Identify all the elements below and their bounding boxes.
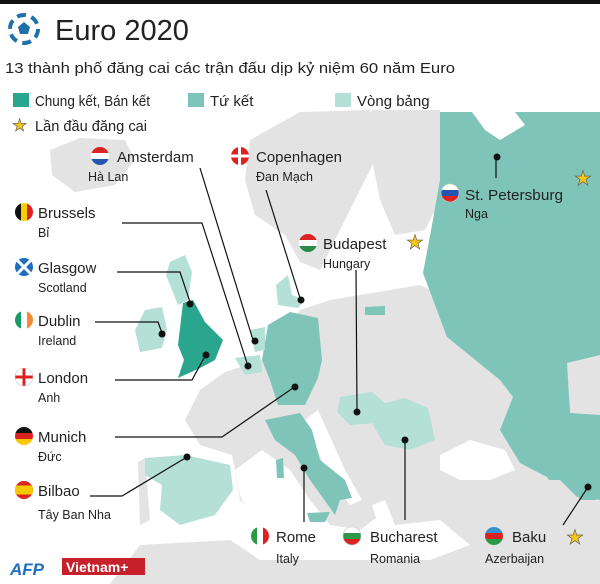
- stars: ★: [566, 527, 584, 549]
- dots: [158, 154, 592, 490]
- logos: AFP: [9, 560, 45, 579]
- stars: ★: [574, 168, 592, 190]
- legend: Vòng bảng: [357, 93, 430, 110]
- Germany: [262, 312, 322, 405]
- Italy: [265, 413, 352, 515]
- city labels: Dublin: [38, 313, 81, 330]
- legend: [12, 93, 430, 135]
- Romania: [373, 398, 435, 450]
- legend: ★: [12, 116, 27, 135]
- city labels: Glasgow: [38, 260, 97, 277]
- Ireland: [135, 307, 167, 352]
- city labels: Đan Mạch: [256, 170, 313, 184]
- Hungary: [337, 392, 387, 425]
- city labels: Hungary: [323, 257, 371, 271]
- city labels: London: [38, 370, 88, 387]
- Netherlands/Belgium: [250, 327, 265, 352]
- subtitle: 13 thành phố đăng cai các trận đấu dịp kỷ niệm 60 năm Euro: [5, 60, 455, 77]
- title: Euro 2020: [55, 15, 189, 47]
- stars: [406, 168, 592, 549]
- city labels: St. Petersburg: [465, 187, 563, 204]
- logos: [9, 558, 145, 579]
- city labels: Baku: [512, 529, 546, 546]
- city labels: Bỉ: [38, 226, 49, 240]
- Russia mid teal: [423, 112, 600, 500]
- city labels: Anh: [38, 391, 60, 405]
- legend: Chung kết, Bán kết: [35, 93, 151, 110]
- city labels: Tây Ban Nha: [38, 508, 111, 522]
- city labels: Azerbaijan: [485, 552, 544, 566]
- city labels: Bucharest: [370, 529, 438, 546]
- city labels: Copenhagen: [256, 149, 342, 166]
- Spain: [138, 458, 150, 525]
- city labels: Amsterdam: [117, 149, 194, 166]
- legend: Lần đầu đăng cai: [35, 118, 147, 135]
- city labels: Romania: [370, 552, 420, 566]
- city labels: Budapest: [323, 236, 387, 253]
- stars: ★: [406, 232, 424, 254]
- city labels: [38, 149, 563, 566]
- ball icon: [10, 15, 38, 43]
- seas: [230, 410, 515, 560]
- England: [178, 300, 223, 378]
- Azerbaijan: [575, 483, 596, 500]
- city labels: Rome: [276, 529, 316, 546]
- Scotland: [166, 255, 192, 305]
- city labels: Ireland: [38, 334, 76, 348]
- logos: Vietnam+: [66, 559, 128, 575]
- Denmark: [276, 275, 305, 308]
- leader lines: [90, 158, 588, 525]
- land grey: [50, 110, 600, 584]
- city labels: Bilbao: [38, 483, 80, 500]
- city labels: Scotland: [38, 281, 87, 295]
- city labels: Đức: [38, 450, 62, 464]
- city labels: Nga: [465, 207, 488, 221]
- city labels: Italy: [276, 552, 300, 566]
- city labels: Munich: [38, 429, 86, 446]
- map: [50, 110, 600, 584]
- legend: Tứ kết: [210, 93, 254, 110]
- city labels: Hà Lan: [88, 170, 128, 184]
- city labels: Brussels: [38, 205, 96, 222]
